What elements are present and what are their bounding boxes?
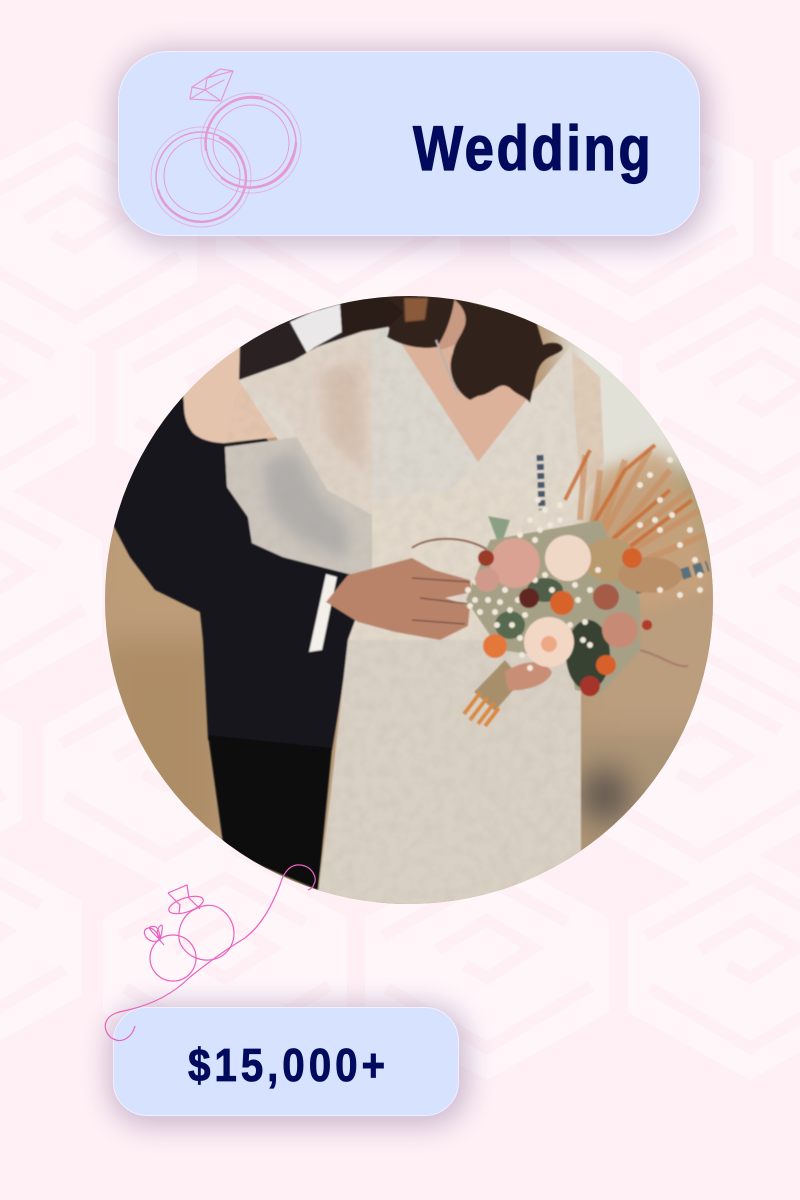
icon: continuous line bride and groom rings [105,865,315,1040]
cuff and groom hand [309,558,472,652]
foreground artwork [104,68,713,1089]
bouquet [412,445,708,726]
groom suit [100,290,420,890]
bride skin and neck [402,304,527,462]
price: $15,000+: $15,000+ [188,1041,385,1092]
wedding photo: couple with bouquet [100,280,740,920]
bride hair [340,296,563,403]
groom arm [182,346,276,444]
icon: sketched wedding rings with diamond [151,69,301,227]
panel: price card [113,1007,459,1116]
heading: Wedding: Wedding [413,114,651,184]
panel: wedding title card [118,51,700,236]
dress [220,320,610,920]
necklace [436,340,458,395]
